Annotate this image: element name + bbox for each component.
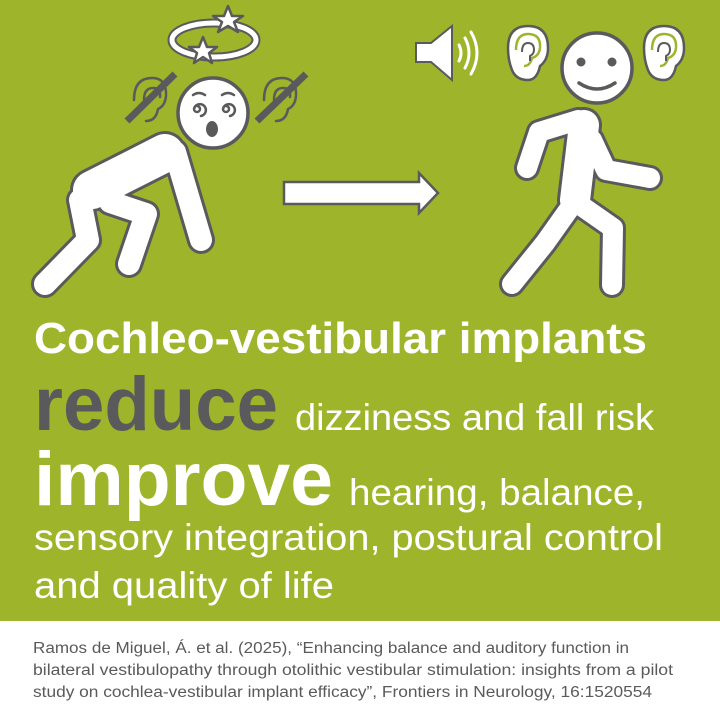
title: Cochleo-vestibular implants xyxy=(34,314,647,363)
body xyxy=(45,152,201,284)
arrow xyxy=(284,173,438,213)
halo with stars xyxy=(172,6,256,63)
text block: improve: improve xyxy=(34,437,333,522)
icon: ears with implants xyxy=(508,26,684,80)
crossed ears xyxy=(127,74,306,121)
text block: improve xyxy=(34,437,663,606)
citation: bilateral vestibulopathy through otolithic vestibular stimulation: insights from a pilot xyxy=(33,662,674,679)
icon: happy walking person xyxy=(512,33,650,285)
text block: improve: sensory integration, postural control xyxy=(34,517,663,558)
citation: Ramos de Miguel, Á. et al. (2025), “Enhancing balance and auditory function in xyxy=(33,640,629,657)
icon: speaker with sound waves xyxy=(416,26,477,80)
text block: reduce: reduce xyxy=(34,362,278,447)
head xyxy=(178,78,248,148)
text block: reduce: dizziness and fall risk xyxy=(295,397,655,438)
icon: dizzy fallen person xyxy=(45,6,306,284)
text block: improve: hearing, balance, xyxy=(349,472,645,513)
citation: study on cochlea-vestibular implant efficacy”, Frontiers in Neurology, 16:1520554 xyxy=(33,684,652,701)
text block: improve: and quality of life xyxy=(34,565,334,606)
citation xyxy=(33,640,674,701)
text block: reduce xyxy=(34,362,655,447)
